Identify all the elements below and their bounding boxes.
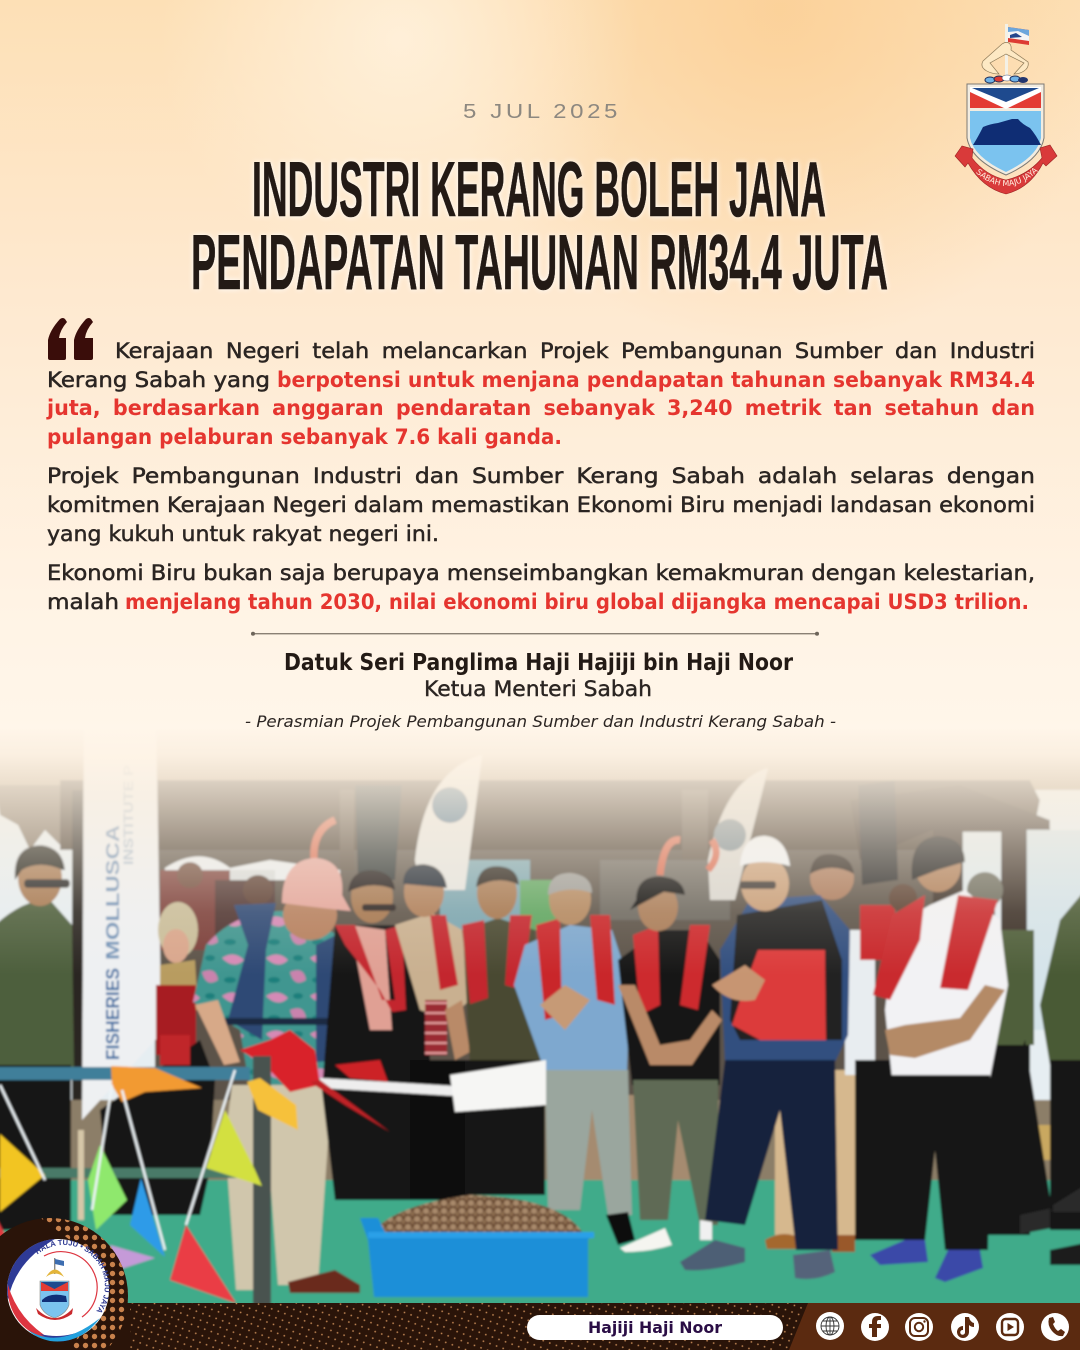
banner: feather flags: INSTITUTE P	[120, 765, 136, 865]
banner: feather flags: MOLLUSCA	[103, 825, 123, 960]
person: man with glasses and black jacket	[322, 870, 430, 1200]
small crest in seal	[36, 1258, 73, 1320]
person: man in black cap and white shirt	[870, 836, 1008, 1282]
attribution: speaker name and role: Ketua Menteri Sabah	[424, 677, 652, 701]
text block: quote paragraph 2	[47, 464, 1035, 546]
banner: feather flags: FISHERIES	[103, 968, 123, 1060]
footer name pill	[527, 1315, 783, 1340]
crest: Sabah coat of arms: SABAH MAJU JAYA	[976, 168, 1038, 186]
title	[191, 145, 888, 306]
person: man in songkok and red life vest	[680, 836, 850, 1279]
person: man in blue shirt	[514, 873, 635, 1245]
top fade over photo	[0, 725, 1080, 975]
banner: feather flags	[82, 728, 898, 1120]
date: 5 JUL 2025	[463, 101, 621, 123]
bunting and rail	[0, 1056, 298, 1306]
seashell tub	[360, 1195, 594, 1297]
person: man in pink cap holding shovel	[193, 858, 407, 1293]
text block: quote paragraph 1	[46, 339, 1035, 449]
text block: quote paragraph 3: malah	[47, 590, 119, 614]
icon: tiktok	[951, 1313, 979, 1341]
text block: quote paragraph 1: pulangan pelaburan sebanyak 7.6 kali ganda.	[47, 425, 562, 449]
person: back row right	[765, 854, 1080, 1265]
text block: quote paragraph 1: Kerang Sabah yang	[47, 368, 270, 392]
person: man in black cap and beige shirt	[395, 864, 470, 1200]
icon: phone	[1041, 1313, 1069, 1341]
text block: quote paragraph 2: yang kukuh untuk rakyat negeri ini.	[47, 522, 439, 546]
crest: Sabah coat of arms	[954, 24, 1058, 194]
footer bar	[0, 1303, 1080, 1350]
event caption: - Perasmian Projek Pembangunan Sumber dan Industri Kerang Sabah -	[245, 712, 836, 731]
icon: website globe	[816, 1312, 844, 1340]
footer name pill: Hajiji Haji Noor	[588, 1318, 722, 1337]
text block: quote paragraph 3: Ekonomi Biru bukan saja berupaya menseimbangkan kemakmuran dengan kelestarian,	[47, 561, 1035, 585]
text block: quote paragraph 2: Projek Pembangunan Industri dan Sumber Kerang Sabah adalah selaras dengan	[47, 464, 1035, 488]
text block: quote paragraph 1: juta, berdasarkan anggaran pendaratan sebanyak 3,240 metrik tan setahun dan	[46, 396, 1035, 420]
shovel	[320, 1060, 546, 1112]
person: man in olive shirt	[462, 866, 545, 1195]
ribbon	[240, 1030, 390, 1132]
text block: quote paragraph 1: Kerajaan Negeri telah melancarkan Projek Pembangunan Sumber dan Industri	[115, 339, 1035, 363]
text block: quote paragraph 1: berpotensi untuk menjana pendapatan tahunan sebanyak RM34.4	[277, 368, 1035, 392]
person: green shirt at left	[0, 845, 74, 1230]
icon: youtube play	[996, 1313, 1024, 1341]
text block: quote paragraph 2: komitmen Kerajaan Negeri dalam memastikan Ekonomi Biru menjadi landasan ekonomi	[47, 493, 1035, 517]
attribution: speaker name and role: Datuk Seri Panglima Haji Hajiji bin Haji Noor	[284, 650, 794, 676]
badge: Hala Tuju Sabah Maju Jaya seal: HALA TUJU • SABAH MAJU JAYA	[36, 1240, 110, 1312]
text block: quote paragraph 3: menjelang tahun 2030, nilai ekonomi biru global dijangka mencapai USD3 trilion.	[125, 590, 1029, 614]
crowd in background	[160, 860, 730, 950]
photo: launch ceremony group	[0, 725, 1080, 1310]
life rings	[314, 820, 716, 875]
icon: instagram	[905, 1313, 933, 1341]
person: woman in headscarf	[100, 902, 215, 1215]
attribution: speaker name and role	[284, 650, 794, 701]
text block: quote paragraph 3	[47, 561, 1035, 614]
icon: facebook	[861, 1313, 889, 1341]
icon: quotation mark	[48, 318, 93, 360]
person: man in black cap and black shirt	[618, 876, 722, 1252]
photo background: sky, roof and floor	[0, 730, 1080, 1310]
badge: Hala Tuju Sabah Maju Jaya seal	[0, 1218, 128, 1348]
